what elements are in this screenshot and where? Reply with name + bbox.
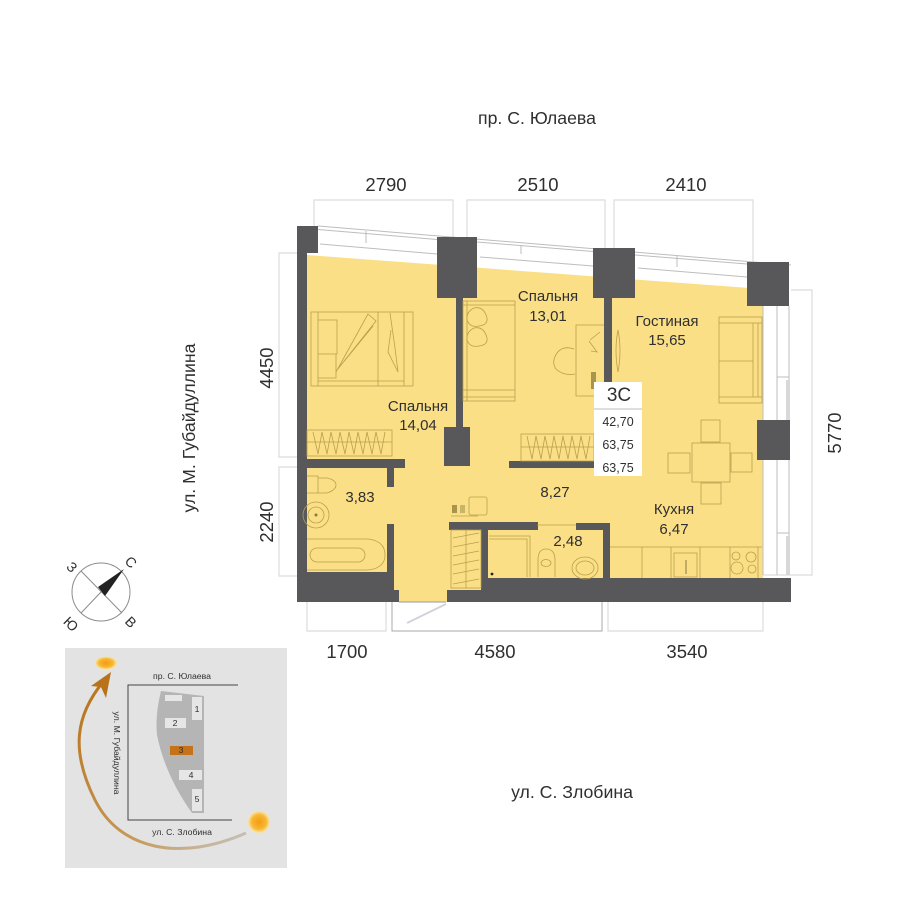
room label: bedroom 14,04 (388, 398, 448, 434)
room label: kitchen: Кухня (654, 501, 694, 518)
site buildings (165, 695, 202, 811)
furniture: hall (451, 497, 576, 525)
room label: kitchen (654, 501, 694, 538)
furniture: kitchen (610, 547, 762, 578)
site boundary lines (128, 685, 238, 820)
site street labels (112, 671, 212, 837)
apartment type box: 42,70 (602, 415, 634, 429)
dimension frames (279, 200, 812, 631)
furniture: desk and chair (554, 325, 604, 396)
room label: kitchen: 6,47 (659, 521, 689, 538)
site street labels: ул. М. Губайдуллина (112, 712, 122, 795)
room label: bathroom: 3,83 (345, 489, 375, 506)
compass: Ю (60, 613, 82, 635)
furniture: dining table (668, 420, 752, 504)
apartment type box: 63,75 (602, 461, 634, 475)
site buildings: 1 (195, 704, 200, 714)
apartment type box (594, 382, 642, 476)
apartment type box: 3С (607, 385, 631, 406)
street label: west: ул. М. Губайдуллина (179, 343, 199, 512)
dimension numbers: 2790 (365, 174, 407, 195)
room label: living room (636, 313, 698, 349)
entrance door (399, 602, 446, 623)
sun: evening (248, 811, 270, 833)
room label: bedroom 13,01 (518, 288, 578, 325)
furniture: hall wardrobe (451, 530, 481, 588)
dimension numbers (256, 174, 845, 662)
dimension numbers: 1700 (326, 641, 368, 662)
furniture: double bed (311, 312, 413, 386)
site buildings: 5 (195, 794, 200, 804)
room label: bedroom 13,01: Спальня (518, 288, 578, 305)
dimension numbers: 3540 (666, 641, 708, 662)
room label: bedroom 13,01: 13,01 (529, 308, 567, 325)
site street labels: пр. С. Юлаева (153, 671, 211, 681)
street label: south: ул. С. Злобина (511, 782, 633, 802)
room label: bedroom 14,04: Спальня (388, 398, 448, 415)
facade windows (318, 226, 791, 575)
street label: north: пр. С. Юлаева (478, 108, 596, 128)
furniture: washroom (489, 536, 598, 579)
furniture: sofa (719, 317, 762, 403)
compass: В (122, 613, 140, 631)
room label: bedroom 14,04: 14,04 (399, 417, 437, 434)
furniture: wardrobe bedroom two (521, 434, 594, 461)
furniture: wardrobe bedroom one (307, 430, 392, 456)
site map panel (65, 648, 287, 868)
compass: С (122, 553, 140, 571)
compass (60, 553, 140, 635)
furniture: tv (616, 330, 620, 372)
compass: З (63, 558, 81, 576)
dimension numbers: 4580 (474, 641, 516, 662)
dimension numbers: 4450 (256, 347, 277, 389)
furniture: bathroom (303, 476, 385, 570)
dimension numbers: 2240 (256, 501, 277, 543)
apartment type box: 63,75 (602, 438, 634, 452)
walls (297, 226, 791, 602)
room label: living room: 15,65 (648, 332, 686, 349)
sun: morning (95, 656, 117, 670)
dimension numbers: 5770 (824, 412, 845, 454)
site buildings: 4 (189, 770, 194, 780)
site street labels: ул. С. Злобина (152, 827, 212, 837)
sun path arrow (79, 672, 246, 849)
apartment floor area (307, 255, 763, 602)
site buildings: 3 (179, 745, 184, 755)
site plot (156, 691, 204, 813)
room label: washroom: 2,48 (553, 533, 583, 550)
site buildings: 2 (173, 718, 178, 728)
furniture: single bed (463, 301, 515, 401)
room label: living room: Гостиная (636, 313, 698, 330)
dimension numbers: 2510 (517, 174, 559, 195)
room label: hall: 8,27 (540, 484, 570, 501)
dimension numbers: 2410 (665, 174, 707, 195)
